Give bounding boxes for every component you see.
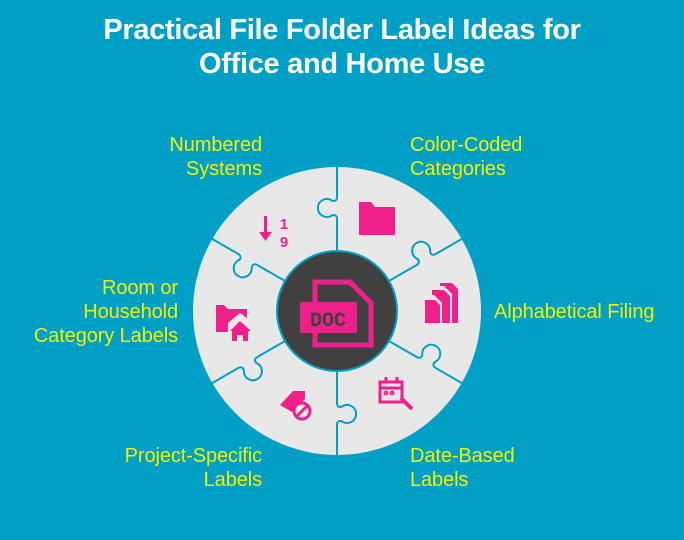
label: project-specific labels <box>125 445 262 491</box>
icon: stacked pages <box>425 283 458 323</box>
title: Practical File Folder Label Ideas for <box>103 14 581 46</box>
label: project-specific labels: Project-Specific <box>125 445 262 467</box>
icon: calendar edit <box>380 377 412 409</box>
icon: numbered sort <box>259 216 288 251</box>
label: room or household <box>34 277 178 347</box>
icon: tag with block <box>280 391 310 419</box>
label: numbered systems: Numbered <box>169 134 262 156</box>
label: date-based labels <box>410 445 515 491</box>
label: room or household: Room or <box>102 277 178 299</box>
title: Office and Home Use <box>199 48 485 80</box>
label: color-coded categories <box>410 134 522 180</box>
label: room or household: Household <box>83 301 178 323</box>
label: date-based labels: Date-Based <box>410 445 515 467</box>
icon: house folder <box>216 305 251 341</box>
label: project-specific labels: Labels <box>204 469 262 491</box>
label: color-coded categories: Color-Coded <box>410 134 522 156</box>
label: color-coded categories: Categories <box>410 158 506 180</box>
label: numbered systems: Systems <box>186 158 262 180</box>
center circle: DOC icon: DOC <box>310 310 346 333</box>
label: numbered systems <box>169 134 262 180</box>
title <box>103 14 581 80</box>
icon: numbered sort: 1 <box>280 216 288 233</box>
icon: folder <box>359 202 395 235</box>
center circle: DOC icon <box>277 251 397 371</box>
label: room or household: Category Labels <box>34 325 178 347</box>
label: date-based labels: Labels <box>410 469 468 491</box>
icon: numbered sort: 9 <box>280 234 288 251</box>
label: alphabetical filing: Alphabetical Filing <box>494 301 654 323</box>
